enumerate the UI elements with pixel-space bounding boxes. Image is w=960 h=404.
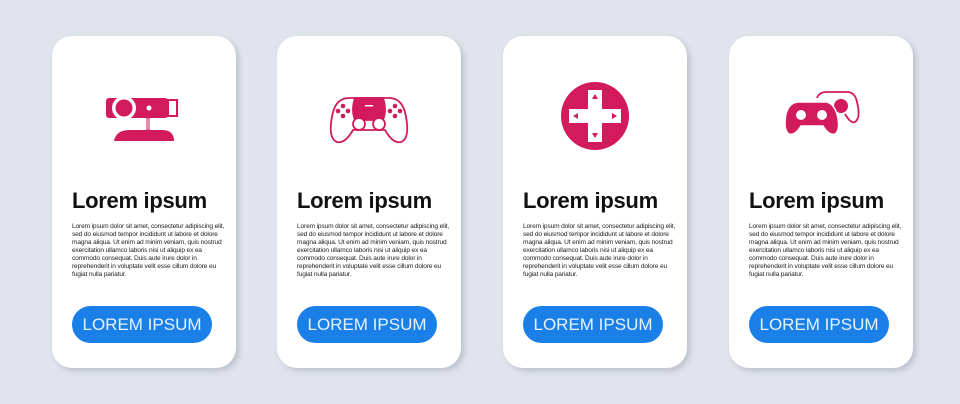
icon: d-pad circle	[561, 82, 629, 150]
heading: Lorem ipsum	[523, 188, 658, 213]
body text: Lorem ipsum dolor sit amet, consectetur adipiscing elit, sed do eiusmod tempor incididunt ut labore et dolore magna aliqua. Ut enim ad minim veniam, quis nostrud exercitation ullamco laboris nisi ut aliquip ex ea commodo consequat. Duis aute irure dolor in reprehenderit in voluptate velit esse cillum dolore eu fugiat nulla pariatur.	[297, 223, 449, 278]
body text: Lorem ipsum dolor sit amet, consectetur adipiscing elit, sed do eiusmod tempor incididunt ut labore et dolore magna aliqua. Ut enim ad minim veniam, quis nostrud exercitation ullamco laboris nisi ut aliquip ex ea commodo consequat. Duis aute irure dolor in reprehenderit in voluptate velit esse cillum dolore eu fugiat nulla pariatur.	[749, 223, 901, 278]
button: LOREM IPSUM	[82, 315, 202, 334]
icon: webcam	[106, 98, 178, 141]
button: LOREM IPSUM	[533, 315, 653, 334]
icon: gamepad outline	[330, 97, 408, 144]
heading: Lorem ipsum	[749, 188, 884, 213]
icon: two gamepads	[786, 91, 860, 134]
card 2: gamepad	[277, 36, 461, 368]
button	[72, 306, 212, 343]
button	[749, 306, 889, 343]
heading: Lorem ipsum	[72, 188, 207, 213]
button	[523, 306, 663, 343]
button: LOREM IPSUM	[307, 315, 427, 334]
card 1: webcam	[52, 36, 236, 368]
button	[297, 306, 437, 343]
heading: Lorem ipsum	[297, 188, 432, 213]
card 3: dpad	[503, 36, 687, 368]
card 4: two gamepads	[729, 36, 913, 368]
body text: Lorem ipsum dolor sit amet, consectetur adipiscing elit, sed do eiusmod tempor incididunt ut labore et dolore magna aliqua. Ut enim ad minim veniam, quis nostrud exercitation ullamco laboris nisi ut aliquip ex ea commodo consequat. Duis aute irure dolor in reprehenderit in voluptate velit esse cillum dolore eu fugiat nulla pariatur.	[523, 223, 675, 278]
body text: Lorem ipsum dolor sit amet, consectetur adipiscing elit, sed do eiusmod tempor incididunt ut labore et dolore magna aliqua. Ut enim ad minim veniam, quis nostrud exercitation ullamco laboris nisi ut aliquip ex ea commodo consequat. Duis aute irure dolor in reprehenderit in voluptate velit esse cillum dolore eu fugiat nulla pariatur.	[72, 223, 224, 278]
button: LOREM IPSUM	[759, 315, 879, 334]
